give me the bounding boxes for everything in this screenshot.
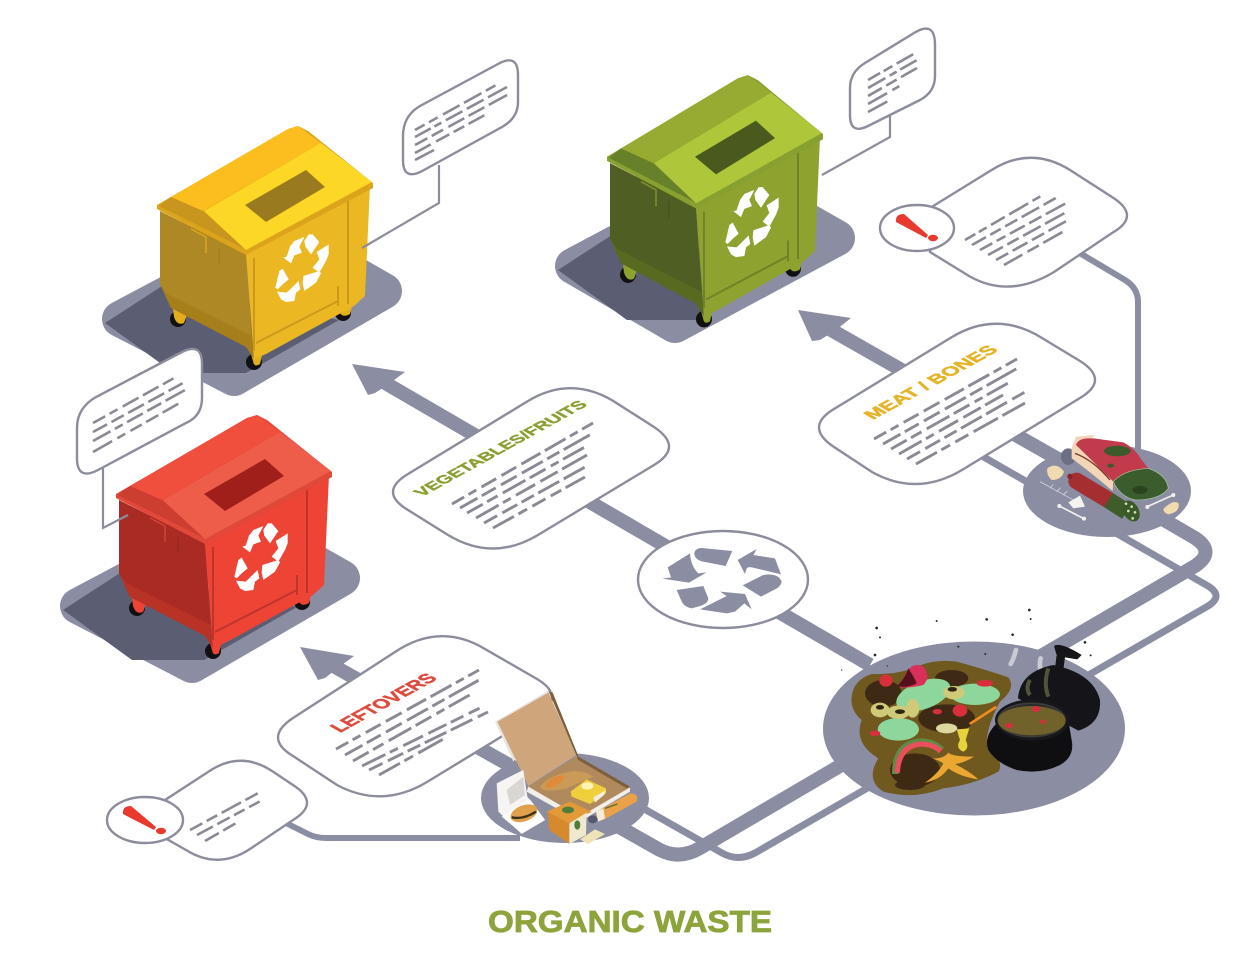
heading: meat / bones: MEAT / BONES	[859, 342, 1002, 422]
cooking pot	[987, 699, 1072, 772]
burger box	[497, 770, 545, 834]
illustration: pizza box and leftovers	[495, 691, 637, 844]
watermelon	[895, 742, 942, 774]
pizza box	[495, 691, 630, 822]
garbage bag	[1018, 645, 1100, 731]
panel: vegetables and fruits	[393, 388, 669, 548]
callout: bottom alert	[107, 761, 307, 860]
pipes and flow arrows	[284, 252, 1216, 858]
steak	[1061, 435, 1168, 500]
icon: recycle on green bin	[725, 187, 779, 257]
recycle symbol circle	[638, 531, 808, 628]
yellow bin shadow	[105, 233, 384, 378]
panel: meat and bones	[819, 324, 1095, 484]
green bin	[607, 75, 823, 327]
thin pipe lower loop	[625, 775, 890, 858]
vegetable lumps	[871, 686, 965, 733]
panel: leftovers	[278, 636, 552, 796]
illustration: spoiled meat and bones	[1040, 435, 1179, 525]
banana peel	[925, 753, 978, 783]
arrow: vegetables to yellow bin	[352, 364, 870, 665]
sludge	[851, 661, 1011, 795]
red bin	[116, 415, 332, 659]
ground disc: leftovers	[481, 753, 649, 843]
yellow bin	[157, 126, 373, 370]
apple	[897, 665, 927, 688]
callout: green bin note	[822, 29, 935, 175]
callout: yellow bin note	[362, 60, 518, 248]
red fruit	[870, 675, 993, 736]
callout: top alert	[880, 158, 1127, 287]
greens	[878, 672, 1000, 741]
icon: recycle on red bin	[234, 523, 288, 591]
arrow: meat to green bin	[798, 310, 1206, 680]
dirt specks	[841, 609, 1092, 671]
arrow: leftovers to red bin	[300, 647, 850, 855]
ground disc: mixed waste	[823, 642, 1125, 816]
red bin shadow	[63, 520, 342, 665]
callout: red bin note	[77, 349, 202, 528]
green bin shadow	[558, 180, 837, 325]
icon: exclamation top	[880, 205, 954, 251]
ground disc: meat and bones	[1023, 445, 1191, 537]
sausage	[1067, 474, 1143, 525]
icon: exclamation bottom	[107, 797, 183, 843]
title: ORGANIC WASTE	[488, 904, 772, 939]
connector: top alert to meat	[1078, 252, 1138, 450]
connector: bottom alert to leftovers	[284, 822, 520, 838]
dark patches	[865, 670, 975, 790]
bones and shells	[1040, 466, 1179, 521]
apple core	[957, 728, 969, 752]
baguette	[588, 793, 637, 823]
icon: recycle on yellow bin	[275, 234, 329, 302]
heading: leftovers: LEFTOVERS	[326, 671, 442, 735]
smoke	[1011, 650, 1043, 677]
juice carton and sandwich	[547, 802, 605, 844]
thin pipe upper loop	[975, 452, 1216, 677]
carrot	[971, 707, 995, 723]
illustration: rotting food pile	[841, 609, 1100, 795]
heading: vegetables/fruits: VEGETABLES/FRUITS	[410, 398, 592, 499]
